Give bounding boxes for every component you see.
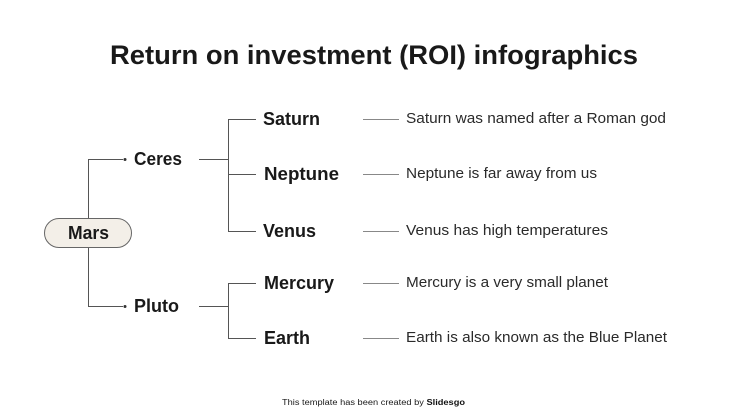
description: Neptune: Neptune is far away from us (406, 165, 597, 182)
description: Mercury: Mercury is a very small planet (406, 274, 609, 291)
label: Neptune: Neptune (264, 164, 339, 184)
bracket: Pluto branches (199, 284, 256, 338)
label: Saturn: Saturn (263, 109, 320, 129)
leader line: Venus (363, 230, 399, 232)
connector: Mars to Pluto (88, 248, 126, 308)
node: Mars: Mars (68, 223, 109, 243)
title: Return on investment (ROI) infographics (110, 40, 638, 70)
node: Mars (44, 218, 132, 248)
connector: Mars to Ceres (88, 158, 126, 218)
label: Venus: Venus (263, 221, 316, 241)
description: Venus: Venus has high temperatures (406, 222, 608, 239)
node: Ceres: Ceres (134, 149, 182, 169)
leader line: Earth (363, 338, 399, 340)
leader line: Neptune (363, 174, 399, 176)
leader line: Mercury (363, 282, 399, 284)
label: Mercury: Mercury (264, 273, 334, 293)
description: Saturn: Saturn was named after a Roman god (406, 110, 666, 127)
description: Earth: Earth is also known as the Blue Planet (406, 329, 668, 346)
footer credit: This template has been created by Slidesgo (282, 398, 465, 407)
leader line: Saturn (363, 118, 399, 120)
bracket: Ceres branches (199, 120, 256, 232)
node: Pluto: Pluto (134, 296, 179, 316)
label: Earth: Earth (264, 328, 310, 348)
